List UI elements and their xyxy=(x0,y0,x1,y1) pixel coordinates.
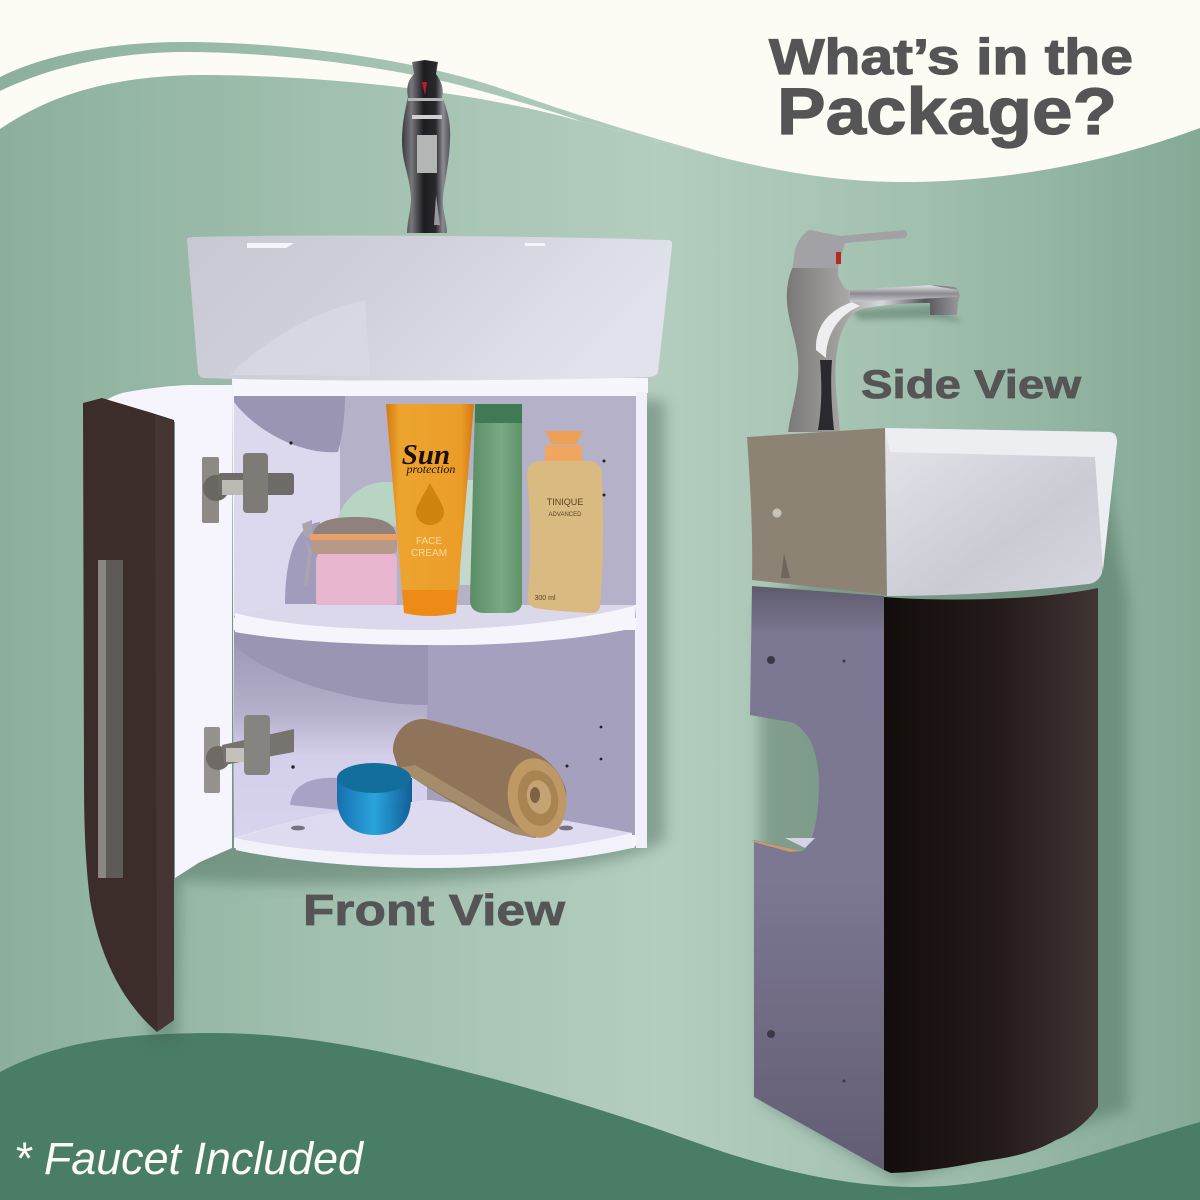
orange tube xyxy=(386,404,474,616)
cabinet top band and side xyxy=(232,378,648,860)
door dark panel xyxy=(83,398,174,1032)
side view label: Side View xyxy=(861,363,1082,407)
upper hinge xyxy=(202,453,294,523)
title: Package? xyxy=(777,74,1117,148)
shadow xyxy=(760,440,1128,1182)
blue jar xyxy=(337,763,412,835)
top cream wave xyxy=(0,0,1200,182)
door handle xyxy=(98,560,123,878)
cream bottle xyxy=(527,431,603,613)
door white interior xyxy=(102,385,232,878)
bottom wave xyxy=(0,1033,1200,1200)
orange tube: protection xyxy=(406,462,455,476)
dark cabinet xyxy=(884,588,1098,1173)
bottom shelf xyxy=(234,800,632,868)
faucet shadow xyxy=(850,305,965,322)
screws xyxy=(767,656,846,1082)
basin xyxy=(187,236,672,381)
footnote: * Faucet Included xyxy=(14,1133,365,1184)
basin white front xyxy=(885,428,1117,596)
right side panel xyxy=(636,392,647,848)
lower hinge xyxy=(204,715,294,793)
cream bottle: 300 ml xyxy=(534,595,556,602)
title: What’s in the xyxy=(769,29,1133,85)
lower compartment xyxy=(234,630,635,840)
green cut-out bump xyxy=(337,482,400,526)
door edge stripe xyxy=(155,415,174,1032)
towel xyxy=(393,719,573,842)
front faucet xyxy=(402,60,450,233)
upper compartment xyxy=(234,396,638,618)
cream bottle: ADVANCED xyxy=(549,512,582,518)
cream bottle: TINIQUE xyxy=(547,497,583,507)
title xyxy=(769,29,1133,148)
orange tube: CREAM xyxy=(411,548,447,559)
front view label: Front View xyxy=(303,886,566,935)
side view product xyxy=(747,230,1128,1182)
orange tube: Sun xyxy=(402,439,450,471)
jar xyxy=(302,517,397,613)
bottom shelf top surface xyxy=(236,800,632,855)
green swoosh band xyxy=(0,42,720,157)
wood cut edge xyxy=(752,838,815,852)
orange tube: FACE xyxy=(416,536,442,547)
basin grey back xyxy=(747,428,887,595)
top shelf xyxy=(235,605,636,645)
purple wall plate xyxy=(750,586,884,1170)
shadows xyxy=(150,400,665,1040)
front view product xyxy=(83,60,672,1040)
green bottle xyxy=(470,404,522,613)
side faucet xyxy=(787,230,960,432)
shelf top surface xyxy=(235,605,634,630)
